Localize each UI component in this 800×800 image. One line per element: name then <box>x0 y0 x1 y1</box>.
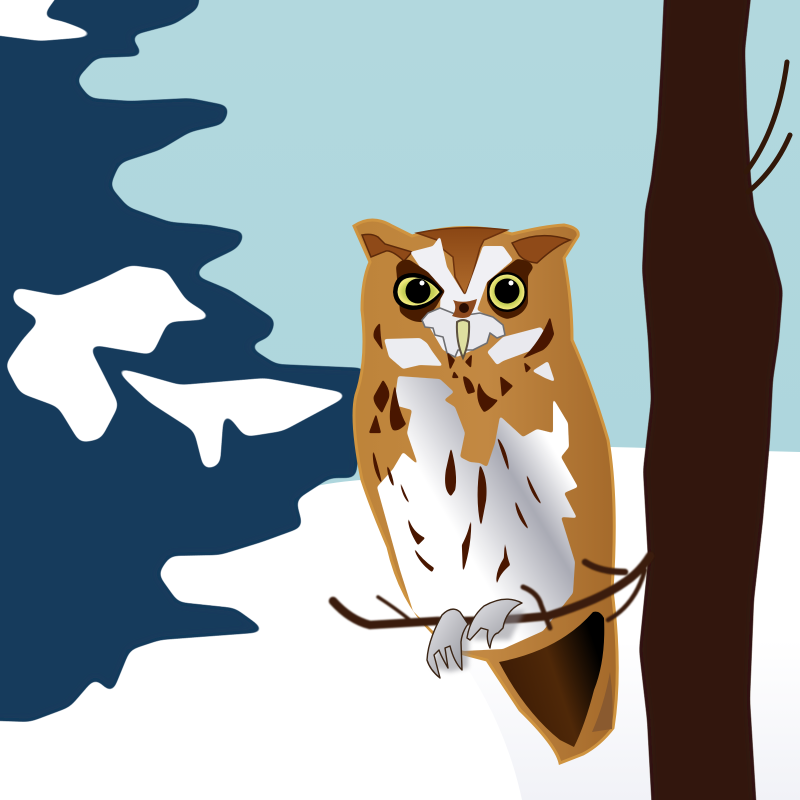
left eye <box>393 273 443 310</box>
left brow patch <box>396 260 445 322</box>
left foot talons <box>427 609 468 678</box>
branch <box>333 556 650 628</box>
dark feather markings <box>369 317 554 595</box>
right chest patch <box>487 327 545 365</box>
left ear <box>362 234 412 261</box>
white face mask <box>410 236 513 357</box>
twigs on trunk <box>746 62 790 192</box>
right brow patch <box>487 259 533 319</box>
talons <box>427 599 522 678</box>
owl <box>333 220 650 763</box>
nose <box>452 299 477 318</box>
left chest patch <box>384 338 443 369</box>
owl body <box>354 220 617 763</box>
wing feather streak <box>592 672 613 732</box>
blue spruce tree <box>0 0 366 722</box>
beak <box>457 320 469 358</box>
crown <box>417 228 507 295</box>
snow ground <box>0 447 800 800</box>
right ear <box>512 236 570 263</box>
feet shadow <box>432 610 525 672</box>
wing <box>499 612 604 747</box>
belly <box>377 376 578 651</box>
tree trunk <box>639 0 783 800</box>
chin feathers <box>422 308 505 357</box>
snow patches on tree <box>0 0 352 470</box>
right eye <box>487 272 527 312</box>
right foot talons <box>467 599 522 648</box>
small right chest patch <box>532 361 555 382</box>
